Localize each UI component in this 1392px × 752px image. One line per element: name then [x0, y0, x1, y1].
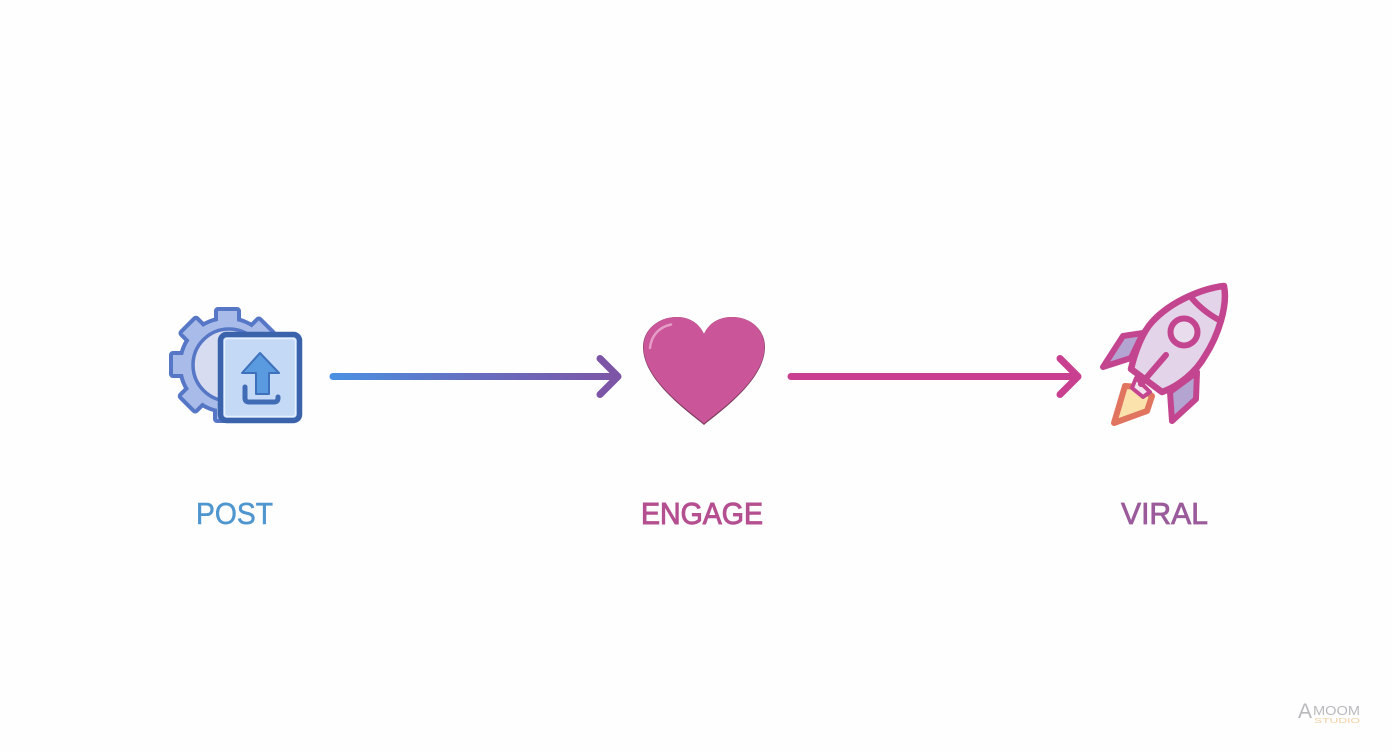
icon: rocket nose line — [1190, 296, 1219, 320]
label: viral: VIRAL — [1121, 496, 1208, 531]
arrow: post to engage — [333, 358, 618, 394]
icon: rocket body — [1131, 286, 1225, 392]
watermark: A — [1298, 700, 1312, 723]
icon: rocket centre line — [1141, 355, 1166, 384]
label: engage: ENGAGE — [641, 496, 763, 531]
icon: rocket — [1103, 286, 1225, 423]
icon: upload card — [220, 334, 300, 420]
icon: rocket nozzle — [1132, 378, 1150, 397]
icon: rocket left fin — [1103, 333, 1143, 367]
watermark: MOOM — [1313, 703, 1360, 718]
label: post: POST — [196, 496, 273, 531]
icon: rocket flame — [1114, 386, 1152, 423]
icon: gear — [173, 311, 281, 419]
icon: upload tray — [245, 387, 278, 402]
icon: upload arrow — [242, 353, 279, 394]
arrow: engage to viral — [791, 358, 1078, 394]
watermark — [1298, 700, 1361, 725]
icon: rocket right fin — [1170, 372, 1197, 421]
icon: heart — [643, 317, 765, 425]
icon: gear with upload card — [173, 311, 300, 420]
icon: rocket window — [1170, 318, 1198, 346]
watermark: STUDIO — [1314, 718, 1361, 725]
